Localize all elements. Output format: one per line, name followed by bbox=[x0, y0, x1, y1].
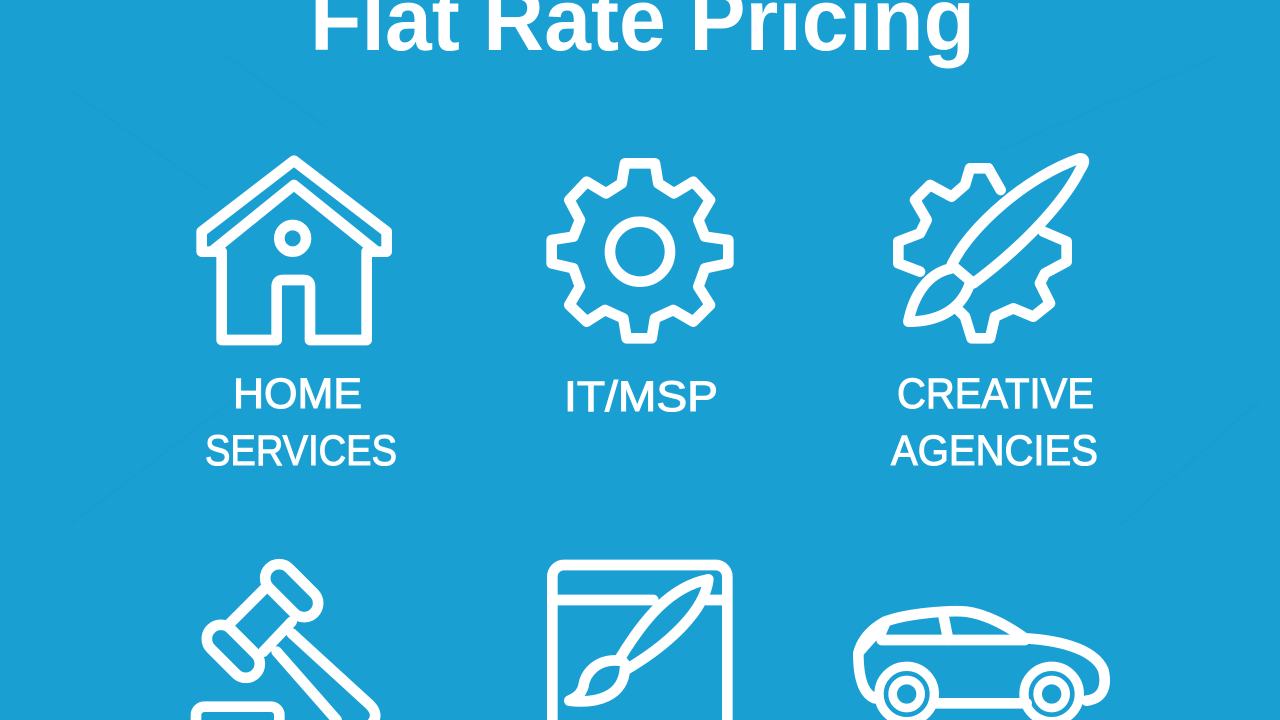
label: IT/MSP: IT/MSP bbox=[564, 373, 718, 421]
icon: browser window with paintbrush bbox=[552, 565, 727, 720]
icon: gear with paintbrush bbox=[898, 158, 1084, 338]
icon: gavel bbox=[196, 558, 375, 720]
label: creative agencies: CREATIVE bbox=[897, 370, 1094, 418]
icon: house bbox=[202, 161, 387, 340]
icon: car bbox=[858, 611, 1105, 720]
label: creative agencies: AGENCIES bbox=[891, 427, 1098, 475]
label: home services bbox=[205, 370, 397, 475]
label: home services: HOME bbox=[233, 370, 362, 418]
icon: gear bbox=[552, 163, 728, 338]
label: home services: SERVICES bbox=[205, 427, 397, 475]
label: creative agencies bbox=[891, 370, 1098, 475]
